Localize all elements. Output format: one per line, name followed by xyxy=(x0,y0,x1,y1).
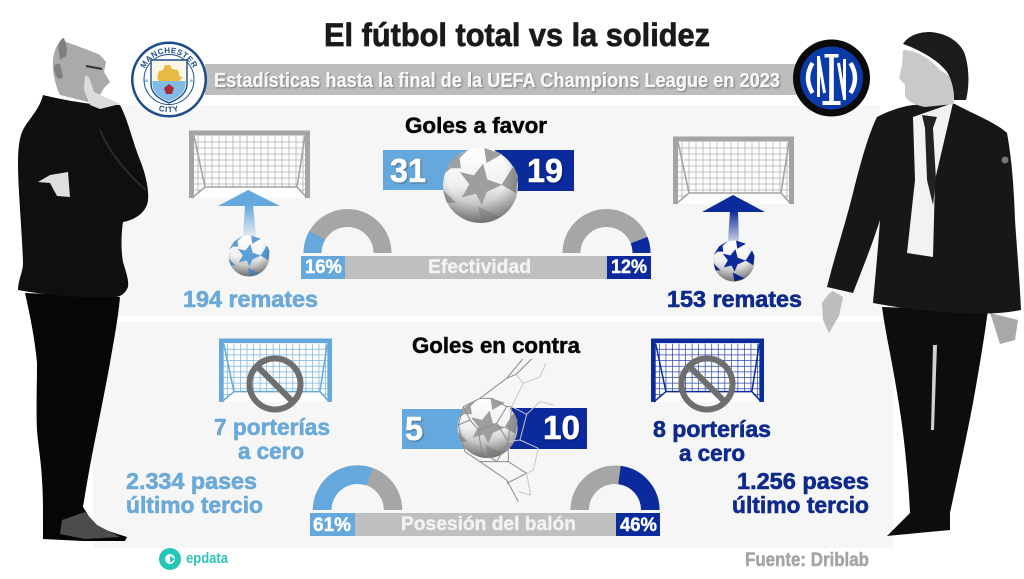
goals-against score bars: 10 xyxy=(543,409,580,446)
icon: Manchester City crest: 94 xyxy=(190,78,195,83)
gauge: Man City possession 61% xyxy=(322,474,393,510)
goals-against score bars: 5 xyxy=(405,410,423,447)
text: 8 porterias a cero: a cero xyxy=(679,440,745,466)
subtitle bar: Estadísticas hasta la final de la UEFA Champions League en 2023 xyxy=(214,70,780,92)
heading: goles en contra: Goles en contra xyxy=(412,333,580,358)
logo: epdata xyxy=(162,550,229,567)
icon: ball hitting net xyxy=(458,359,553,502)
text: 8 porterias a cero xyxy=(653,416,771,466)
text: 2.334 pases ultimo tercio: último tercio xyxy=(126,492,263,518)
text: 2.334 pases ultimo tercio: 2.334 pases xyxy=(126,468,257,494)
panel: goles en contra background xyxy=(93,322,893,548)
heading: goles a favor: Goles a favor xyxy=(405,113,547,138)
bar: posesion del balon: Posesión del balón xyxy=(401,514,576,535)
gauge: Man City effectiveness 16% xyxy=(312,218,382,253)
figure: Guardiola xyxy=(18,38,148,541)
bar: efectividad: Efectividad xyxy=(428,256,531,278)
goals-against score bars xyxy=(402,408,587,449)
panel: goles a favor background xyxy=(93,105,880,316)
text: 8 porterias a cero: 8 porterías xyxy=(653,416,771,442)
bar: posesion del balon xyxy=(310,513,660,536)
icon: light blue ball xyxy=(228,236,270,276)
goals-for score bars: 19 xyxy=(527,152,563,189)
bar: efectividad xyxy=(301,256,651,279)
title: El fútbol total vs la solidez xyxy=(324,17,710,53)
text: 7 porterias a cero xyxy=(214,414,330,464)
bar: posesion del balon: 61% xyxy=(313,515,351,536)
text: 1.256 pases ultimo tercio: 1.256 pases xyxy=(737,468,869,494)
text: 2.334 pases ultimo tercio xyxy=(126,468,263,518)
icon: Manchester City crest xyxy=(131,42,207,118)
text: 7 porterias a cero: a cero xyxy=(238,438,304,464)
goals-for score bars xyxy=(383,150,574,191)
arrow: left shots to goal xyxy=(218,190,280,236)
gauge: Inter effectiveness 12% xyxy=(572,218,642,253)
figure: Inzaghi xyxy=(822,32,1021,536)
icon: Manchester City crest: 18 xyxy=(144,78,149,83)
text: 153 remates: 153 remates xyxy=(667,286,802,312)
gauge: Inter possession 46% xyxy=(580,475,650,510)
bar: posesion del balon: 46% xyxy=(620,515,657,536)
text: 1.256 pases ultimo tercio: último tercio xyxy=(732,492,869,518)
icon: grey goal left xyxy=(189,130,310,198)
text: 7 porterias a cero: 7 porterías xyxy=(214,414,330,440)
goals-for score bars: 31 xyxy=(390,152,426,189)
icon: central football xyxy=(443,148,518,223)
icon: Manchester City crest: MANCHESTER xyxy=(140,48,198,68)
icon: Inter crest xyxy=(793,40,870,116)
bar: efectividad: 12% xyxy=(611,256,647,278)
icon: navy goal with prohibition sign xyxy=(651,338,764,410)
bar: efectividad: 16% xyxy=(305,256,342,278)
arrow: right shots to goal xyxy=(702,195,765,241)
logo: epdata: epdata xyxy=(186,550,229,567)
icon: grey goal right xyxy=(673,136,794,204)
text: source: Fuente: Driblab xyxy=(745,549,869,571)
icon: Manchester City crest: CITY xyxy=(159,106,178,112)
text: 1.256 pases ultimo tercio xyxy=(732,468,869,518)
icon: light blue goal with prohibition sign xyxy=(219,338,332,410)
icon: navy ball xyxy=(714,240,754,282)
subtitle bar xyxy=(205,64,800,95)
text: 194 remates: 194 remates xyxy=(183,286,318,312)
